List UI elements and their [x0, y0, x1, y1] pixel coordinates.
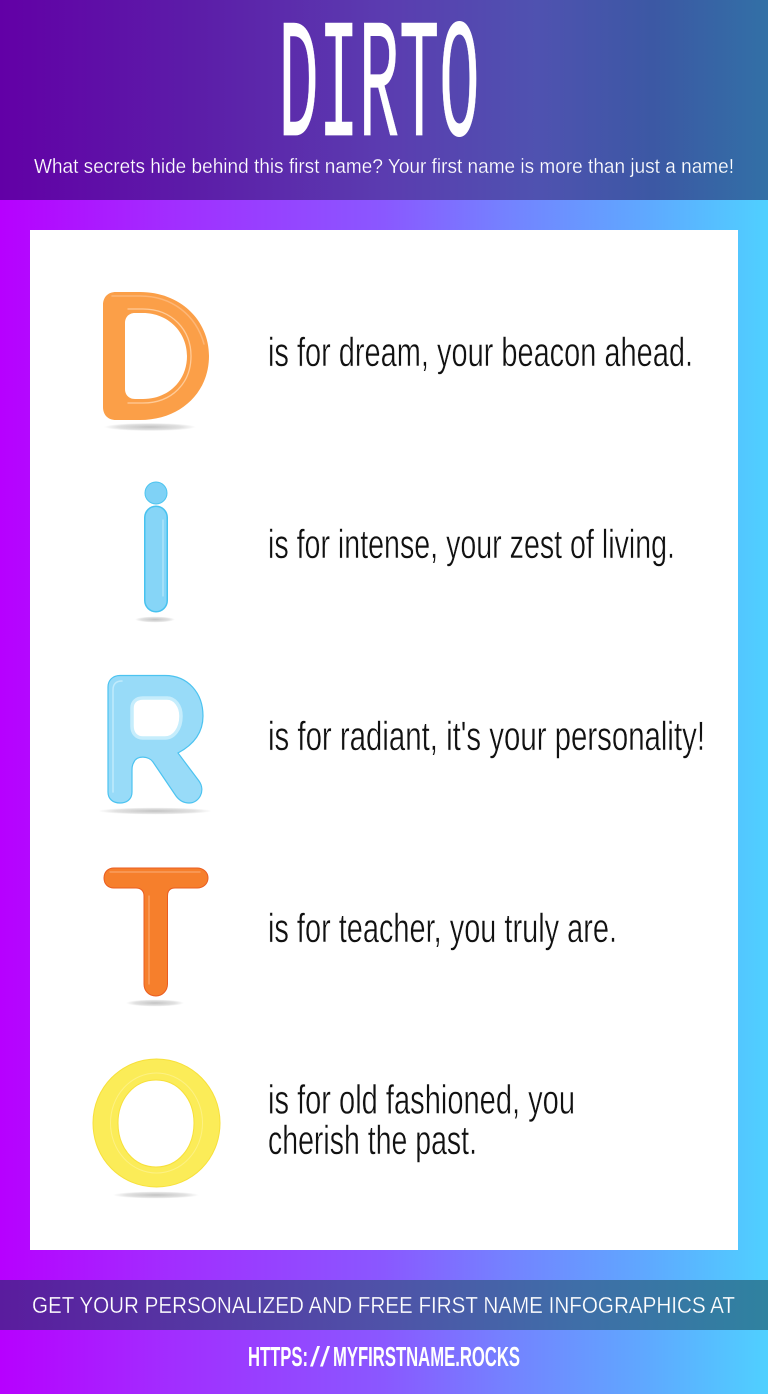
- panel: white content card: [30, 230, 738, 1250]
- icon: letter O: [93, 1059, 220, 1198]
- header band: [0, 0, 768, 200]
- footer url: HTTPS:: [248, 1341, 308, 1372]
- text: T line: is for teacher, you truly are.: [268, 905, 617, 951]
- icon: letter i: [135, 482, 175, 622]
- text: O line: cherish the past.: [268, 1117, 477, 1163]
- icon: letter R: [98, 676, 212, 814]
- footer url: [248, 1341, 520, 1372]
- icon: letter D: [103, 292, 209, 431]
- subtitle: What secrets hide behind this first name? Your first name is more than just a name!: [34, 155, 734, 178]
- text: O line: [268, 1076, 575, 1163]
- footer url: MYFIRSTNAME.ROCKS: [333, 1341, 520, 1372]
- footer url: //: [310, 1341, 330, 1372]
- icon: letter T: [104, 868, 208, 1006]
- footer band: [0, 1280, 768, 1330]
- text: O line: is for old fashioned, you: [268, 1076, 575, 1122]
